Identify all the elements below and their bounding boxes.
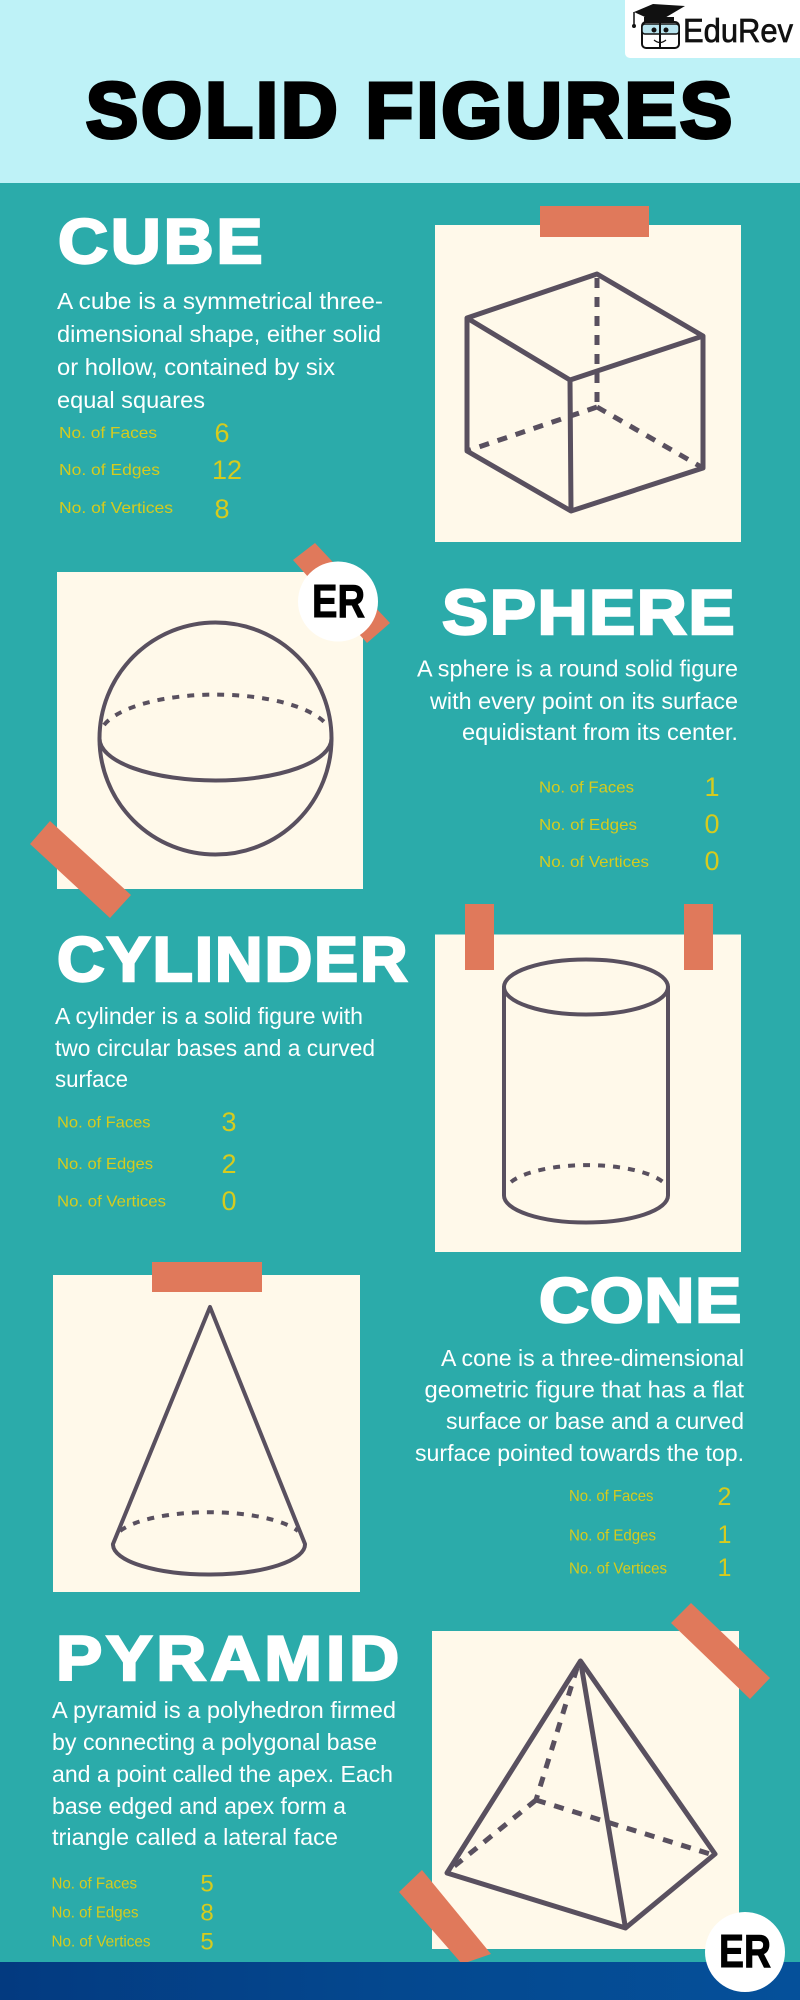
text: pyramid description: base edged and apex form a <box>52 1793 346 1819</box>
text: cylinder description <box>55 1003 375 1092</box>
stats: sphere: 1 <box>704 772 720 802</box>
stats: cube: 6 <box>214 418 230 448</box>
text: cylinder description: surface <box>55 1066 128 1092</box>
stats: cube: 8 <box>214 494 230 524</box>
stats: sphere: No. of Faces <box>539 780 634 796</box>
text: cube description: dimensional shape, either solid <box>57 321 381 347</box>
text: cube description <box>57 288 383 413</box>
stats: sphere: 0 <box>704 809 720 839</box>
stats: cone: 2 <box>718 1483 731 1511</box>
stats: pyramid: 8 <box>200 1900 214 1926</box>
stats: cube: No. of Faces <box>59 425 157 442</box>
icon: cone drawing <box>113 1307 305 1574</box>
panel: pyramid <box>52 1603 770 1964</box>
badge: ER bottom: ER <box>719 1925 771 1977</box>
stats: sphere: No. of Edges <box>539 817 637 834</box>
heading: cone: CONE <box>539 1266 741 1336</box>
text: pyramid description: triangle called a lateral face <box>52 1824 338 1850</box>
stats: cube <box>59 418 242 524</box>
card: cube <box>435 206 741 542</box>
stats: sphere <box>539 772 720 876</box>
icon: cylinder drawing <box>504 960 668 1222</box>
text: cylinder description: A cylinder is a solid figure with <box>55 1003 363 1029</box>
text: sphere description: with every point on its surface <box>429 688 738 714</box>
text: pyramid description: and a point called the apex. Each <box>52 1761 393 1787</box>
stats: cone: No. of Edges <box>569 1528 656 1544</box>
stats: cylinder: 3 <box>221 1107 237 1137</box>
stats: cone: No. of Vertices <box>569 1560 667 1578</box>
panel: cube <box>57 206 741 542</box>
text: pyramid description <box>52 1697 396 1850</box>
logo: EduRev <box>625 0 800 58</box>
text: cylinder description: two circular bases and a curved <box>55 1035 375 1061</box>
stats: pyramid: No. of Vertices <box>52 1934 150 1950</box>
card: cylinder <box>435 904 741 1252</box>
heading: sphere: SPHERE <box>442 578 735 648</box>
card: sphere <box>30 543 390 918</box>
stats: cylinder <box>57 1107 237 1216</box>
stats: cone <box>569 1483 731 1582</box>
stats: pyramid: 5 <box>200 1870 214 1898</box>
text: sphere description: equidistant from its center. <box>462 719 738 745</box>
stats: cylinder: 2 <box>221 1149 237 1179</box>
stats: cylinder: 0 <box>221 1186 237 1216</box>
text: cone description: geometric figure that has a flat <box>424 1376 745 1402</box>
stats: sphere: 0 <box>704 846 720 876</box>
card: cone <box>53 1262 360 1592</box>
stats: pyramid: 5 <box>200 1928 214 1956</box>
stats: cylinder: No. of Vertices <box>57 1194 166 1210</box>
text: pyramid description: A pyramid is a polyhedron firmed <box>52 1697 396 1723</box>
text: cone description: A cone is a three-dimensional <box>441 1345 744 1371</box>
stats: pyramid: No. of Edges <box>52 1904 138 1922</box>
stats: cylinder: No. of Faces <box>57 1114 150 1132</box>
stats: pyramid <box>52 1870 214 1956</box>
stats: cone: No. of Faces <box>569 1488 654 1505</box>
text: cube description: equal squares <box>57 387 205 413</box>
text: cone description: surface pointed towards the top. <box>415 1440 744 1466</box>
stats: cone: 1 <box>718 1521 731 1549</box>
badge: ER bottom <box>705 1912 785 1992</box>
stats: pyramid: No. of Faces <box>52 1876 137 1892</box>
icon: sphere drawing <box>100 622 332 854</box>
icon: graduate cap face <box>632 4 685 48</box>
title: SOLID FIGURES <box>86 66 732 154</box>
panel: cone <box>53 1262 745 1592</box>
text: cone description <box>415 1345 745 1466</box>
text: cube description: A cube is a symmetrical three- <box>57 288 383 314</box>
stats: cone: 1 <box>718 1554 731 1582</box>
panel: sphere <box>30 543 738 918</box>
stats: cube: 12 <box>212 455 242 485</box>
card: pyramid <box>399 1603 770 1964</box>
text: cube description: or hollow, contained by six <box>57 354 336 380</box>
text: sphere description: A sphere is a round solid figure <box>417 656 738 682</box>
text: pyramid description: by connecting a polygonal base <box>52 1729 377 1755</box>
text: sphere description <box>417 656 738 745</box>
icon: pyramid drawing <box>447 1661 715 1928</box>
logo wordmark: EduRev <box>683 12 793 49</box>
panel: cylinder <box>55 904 741 1252</box>
text: cone description: surface or base and a curved <box>446 1408 744 1434</box>
icon: cube drawing <box>467 274 703 511</box>
badge: ER <box>298 562 378 642</box>
stats: cylinder: No. of Edges <box>57 1156 153 1173</box>
badge: ER: ER <box>312 575 365 627</box>
header band <box>0 0 800 183</box>
heading: cylinder: CYLINDER <box>57 924 408 995</box>
heading: cube: CUBE <box>58 207 263 277</box>
stats: cube: No. of Vertices <box>59 500 173 517</box>
heading: pyramid: PYRAMID <box>56 1624 399 1694</box>
stats: cube: No. of Edges <box>59 462 160 479</box>
stats: sphere: No. of Vertices <box>539 854 649 871</box>
